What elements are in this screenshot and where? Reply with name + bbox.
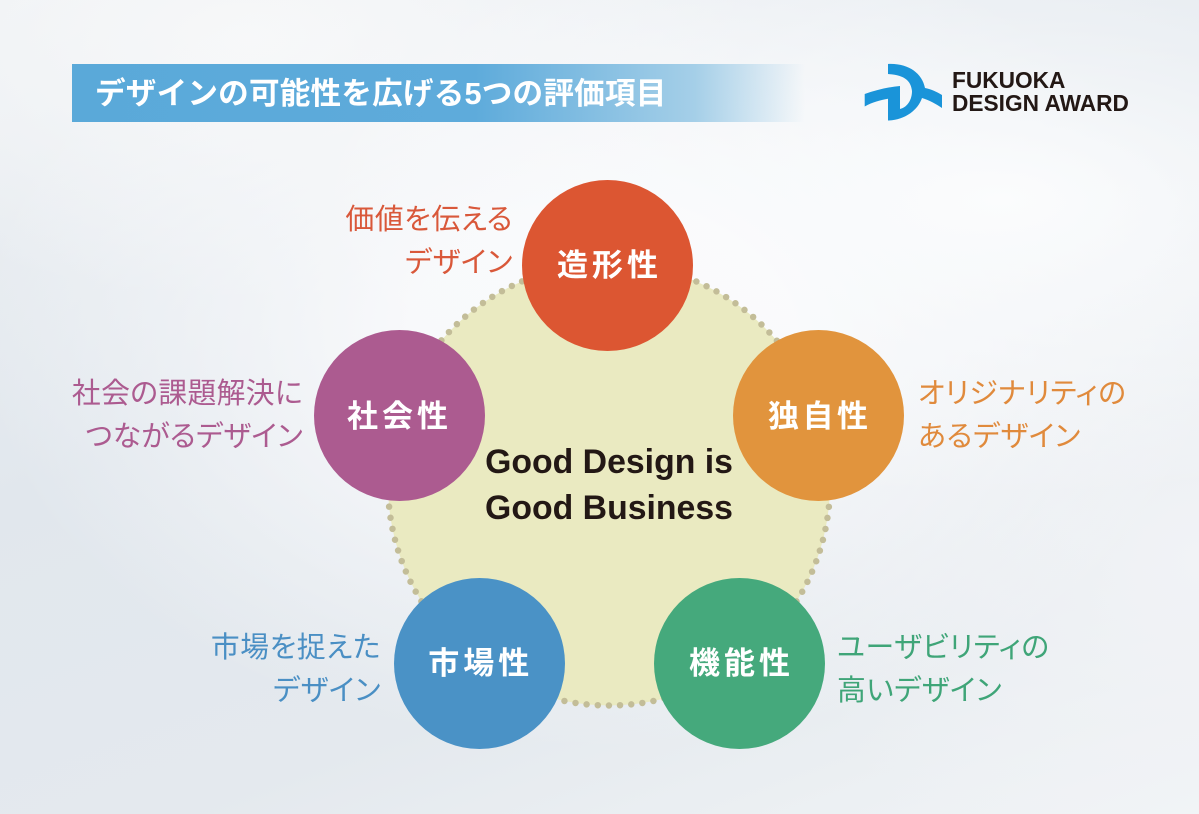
icon: logo mark bbox=[864, 64, 942, 120]
label: 造形性: デザイン bbox=[405, 246, 513, 278]
label: 機能性: ユーザビリティの bbox=[837, 632, 1050, 664]
label: 機能性: 高いデザイン bbox=[837, 674, 1002, 706]
logo bbox=[864, 64, 1129, 120]
label: 機能性 bbox=[837, 632, 1050, 706]
label: 社会性: 社会の課題解決に bbox=[72, 378, 303, 410]
logo wordmark: FUKUOKA bbox=[952, 67, 1065, 93]
label: 市場性 bbox=[211, 632, 381, 706]
circle: 機能性 bbox=[654, 578, 825, 749]
title text: デザインの可能性を広げる5つの評価項目 bbox=[95, 77, 667, 111]
central message: Good Business bbox=[485, 488, 733, 526]
label: 市場性: 市場を捉えた bbox=[211, 632, 381, 664]
circle: 機能性: 機能性 bbox=[689, 646, 794, 681]
circle: 造形性: 造形性 bbox=[557, 248, 662, 283]
circle: 社会性 bbox=[314, 330, 485, 501]
label: 造形性 bbox=[345, 204, 513, 278]
label: 独自性 bbox=[918, 378, 1127, 452]
label: 造形性: 価値を伝える bbox=[345, 204, 513, 236]
label: 市場性: デザイン bbox=[273, 674, 381, 706]
circle: 市場性: 市場性 bbox=[428, 646, 533, 681]
circle: 造形性 bbox=[522, 180, 693, 351]
logo wordmark: DESIGN AWARD bbox=[952, 90, 1129, 116]
central circle bbox=[386, 278, 832, 709]
circle: 独自性: 独自性 bbox=[768, 399, 872, 434]
logo wordmark bbox=[952, 67, 1129, 116]
circle: 独自性 bbox=[733, 330, 904, 501]
label: 独自性: あるデザイン bbox=[918, 420, 1081, 452]
label: 社会性: つながるデザイン bbox=[85, 420, 303, 452]
label: 社会性 bbox=[72, 378, 303, 452]
circle: 市場性 bbox=[394, 578, 565, 749]
central message bbox=[485, 443, 733, 526]
circle: 社会性: 社会性 bbox=[347, 399, 452, 434]
label: 独自性: オリジナリティの bbox=[918, 378, 1127, 410]
title banner bbox=[72, 64, 805, 122]
central message: Good Design is bbox=[485, 443, 733, 481]
